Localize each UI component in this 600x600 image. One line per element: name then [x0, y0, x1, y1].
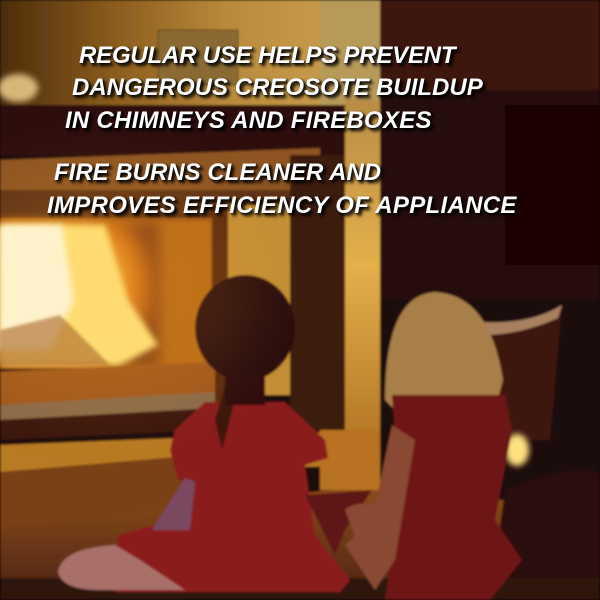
- line 1: REGULAR USE HELPS PREVENT: [79, 42, 455, 69]
- line 5: IMPROVES EFFICIENCY OF APPLIANCE: [47, 192, 517, 219]
- overall warm glow: [0, 170, 260, 410]
- girl right: [305, 292, 522, 600]
- rug: [0, 578, 600, 600]
- pillar and stone surround: [210, 100, 380, 435]
- hearth: [0, 362, 382, 528]
- girl left: [58, 275, 350, 592]
- line 3: IN CHIMNEYS AND FIREBOXES: [65, 107, 432, 134]
- right side dark room with chair: [380, 300, 600, 600]
- headline: creosote benefit: [65, 42, 488, 134]
- wall outlet and candle: [0, 30, 238, 102]
- headline: efficiency benefit: [47, 159, 520, 219]
- mantel: [0, 105, 345, 220]
- line 4: FIRE BURNS CLEANER AND: [54, 159, 381, 186]
- line 2: DANGEROUS CREOSOTE BUILDUP: [72, 74, 483, 101]
- fire: [0, 218, 212, 368]
- floor: [0, 490, 600, 600]
